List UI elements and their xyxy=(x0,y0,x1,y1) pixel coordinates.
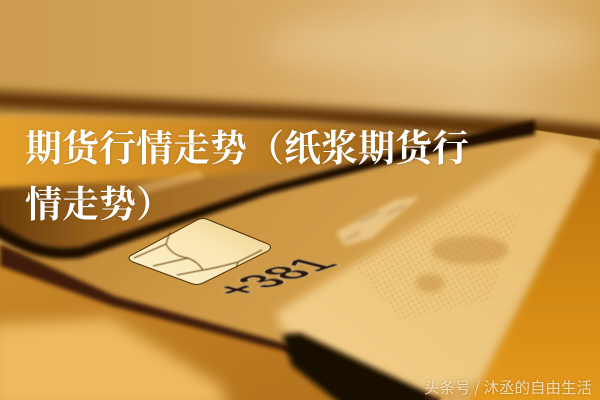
highlight strip on card xyxy=(276,138,592,392)
rear card embossed dots xyxy=(135,170,204,195)
embossed digits upper right xyxy=(336,196,420,246)
black shadow under rear card xyxy=(0,120,535,259)
rear card lower face xyxy=(0,160,383,254)
hologram dark motif xyxy=(416,236,508,292)
right orange region xyxy=(465,150,600,400)
top bright haze xyxy=(260,15,600,75)
title: 期货行情走势（纸浆期货行情走势） xyxy=(25,118,469,228)
chip xyxy=(129,218,270,284)
rear card xyxy=(0,116,535,192)
dark pocket shadow lower right xyxy=(282,333,440,400)
main card lower edge shadow xyxy=(0,244,440,400)
dark band behind cards xyxy=(0,90,600,145)
main card body xyxy=(0,130,600,400)
hologram dot texture xyxy=(350,205,520,320)
lower left card xyxy=(0,245,440,400)
embossed number 381: +381 xyxy=(197,254,351,301)
watermark: 头条号 / 沐丞的自由生活 xyxy=(424,376,592,398)
